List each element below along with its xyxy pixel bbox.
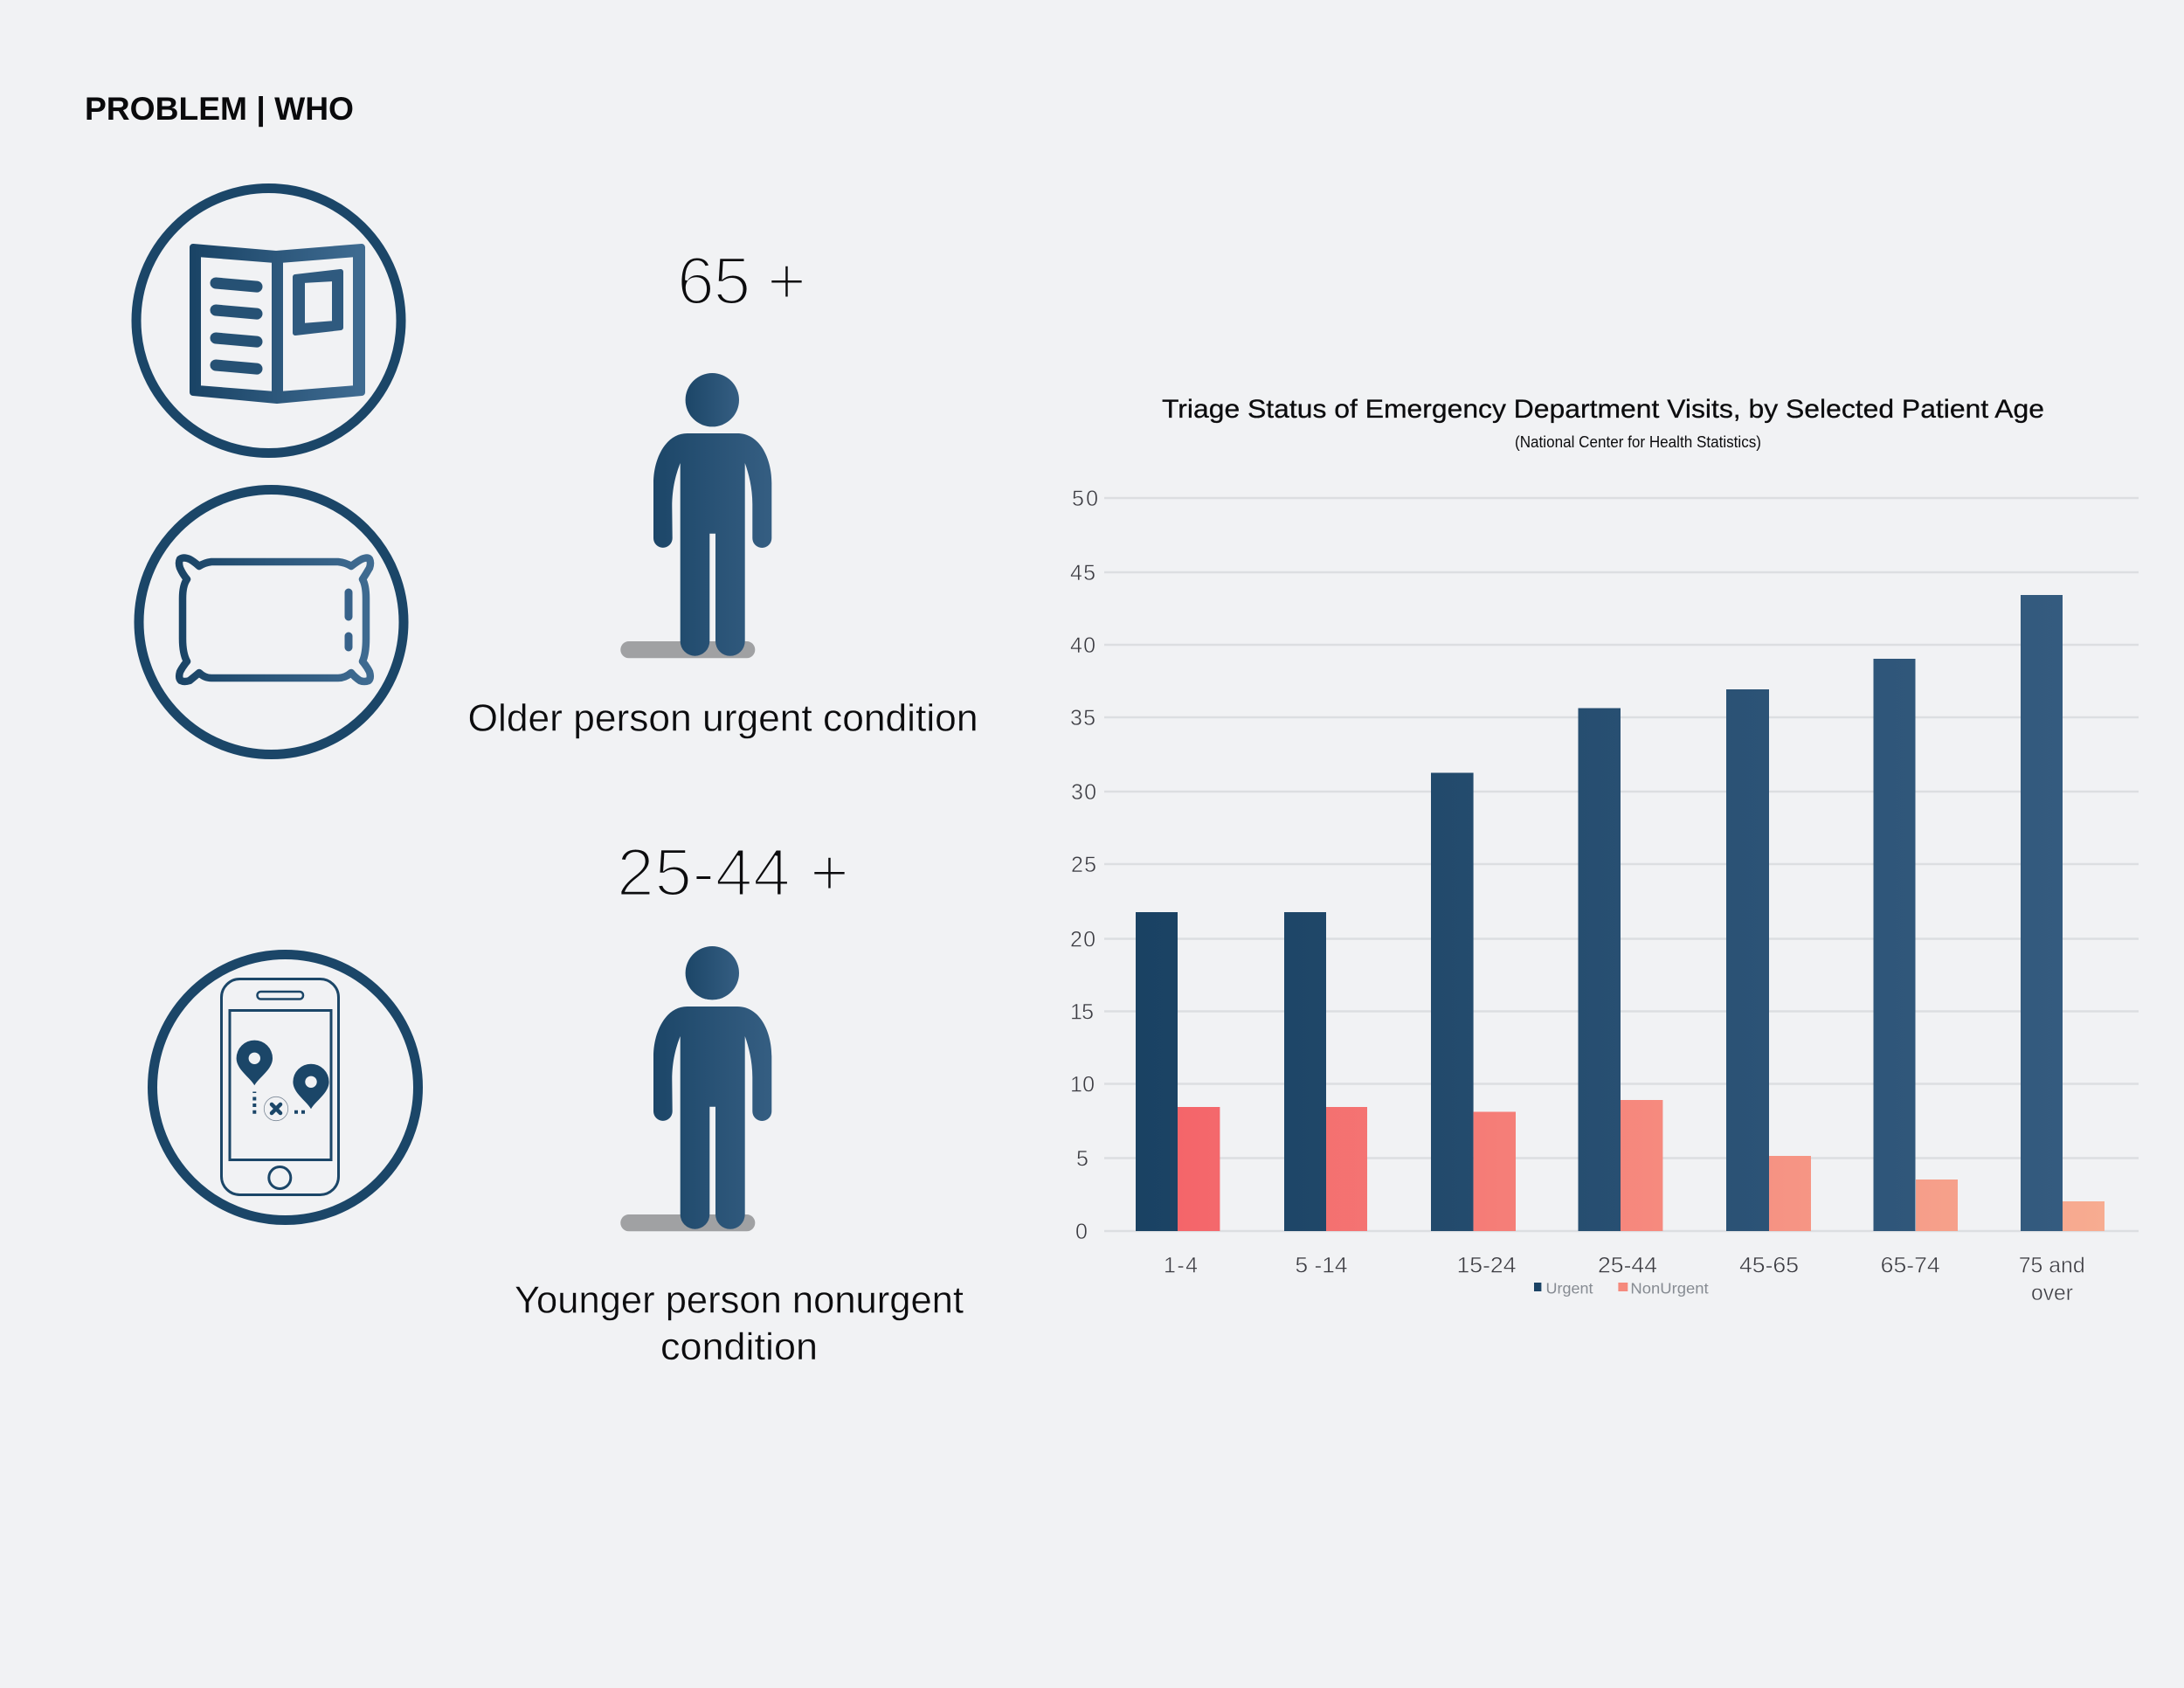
legend: Urgent: [1546, 1279, 1593, 1297]
nonurgent bars: [1178, 1100, 2105, 1231]
x axis labels: 25-44: [1598, 1254, 1657, 1278]
figure: older person: [620, 373, 771, 658]
title: PROBLEM | WHO: [85, 91, 354, 128]
x axis labels: [1164, 1254, 2085, 1305]
x axis labels: 65-74: [1881, 1254, 1940, 1278]
y axis labels: 45: [1070, 561, 1095, 585]
y axis labels: 35: [1070, 706, 1095, 730]
icon: pillow in circle: [139, 489, 404, 755]
y axis labels: 15: [1070, 1000, 1094, 1024]
caption: younger person: Younger person nonurgent: [515, 1279, 964, 1322]
chart heading: (National Center for Health Statistics): [1515, 433, 1761, 451]
legend: [1534, 1279, 1709, 1297]
y axis labels: 40: [1070, 633, 1095, 658]
y axis labels: 25: [1071, 853, 1096, 877]
x axis labels: 1-4: [1164, 1254, 1198, 1278]
y axis labels: 20: [1070, 928, 1095, 952]
x axis labels: 45-65: [1739, 1254, 1799, 1278]
icon: open book in circle: [136, 189, 401, 453]
age label: 65 +: 65 +: [677, 244, 806, 319]
legend: NonUrgent: [1630, 1279, 1709, 1297]
y axis labels: 5: [1076, 1146, 1089, 1171]
y axis labels: [1070, 487, 1098, 1244]
x axis labels: over: [2031, 1281, 2073, 1305]
caption: older person: Older person urgent condition: [468, 697, 978, 740]
x axis labels: 75 and: [2019, 1254, 2085, 1278]
chart heading: Triage Status of Emergency Department Visits, by Selected Patient Age: [1162, 395, 2044, 424]
icon: smartphone map in circle: [152, 954, 418, 1220]
caption: younger person: [515, 1279, 964, 1368]
x axis labels: 5 -14: [1295, 1254, 1348, 1278]
y axis labels: 30: [1071, 780, 1096, 805]
caption: younger person: condition: [660, 1325, 818, 1368]
chart heading: [1162, 395, 2044, 451]
x axis labels: 15-24: [1457, 1254, 1517, 1278]
y axis labels: 50: [1072, 487, 1098, 511]
age label: 25-44 +: 25-44 +: [617, 835, 849, 910]
y axis labels: 0: [1075, 1220, 1088, 1244]
y axis labels: 10: [1070, 1073, 1095, 1097]
urgent bars: [1136, 595, 2063, 1231]
figure: younger person: [620, 946, 771, 1231]
bar chart: triage status by age: [1070, 487, 2139, 1305]
